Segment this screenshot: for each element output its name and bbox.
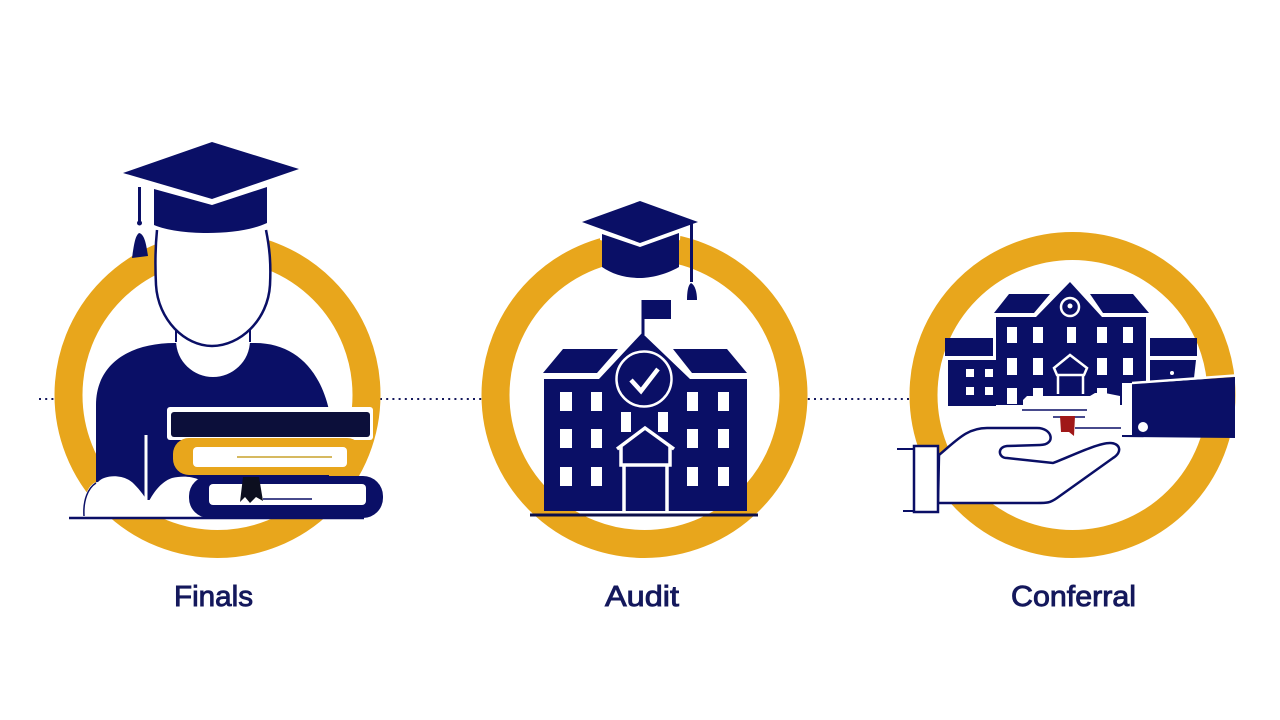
gold ring: Finals <box>68 246 366 544</box>
gold ring: Audit <box>496 246 794 544</box>
graduation cap <box>582 201 698 300</box>
gold ring: Conferral <box>924 246 1222 544</box>
book stack <box>167 407 383 518</box>
receiving hand <box>897 428 1119 512</box>
student figure <box>96 230 329 512</box>
stage 3: Conferral icon <box>897 246 1235 544</box>
stage 1: Finals icon <box>68 142 383 544</box>
label: Audit: Audit <box>605 581 679 613</box>
label: Conferral: Conferral <box>1011 581 1136 613</box>
school building with check mark <box>543 300 747 511</box>
giving hand with sleeve <box>1022 376 1235 438</box>
stage 2: Audit icon <box>496 201 794 544</box>
diploma ribbon <box>1060 416 1075 436</box>
graduation cap <box>123 142 299 258</box>
label: Finals: Finals <box>174 581 253 613</box>
campus building <box>945 282 1197 406</box>
open book <box>84 476 207 517</box>
